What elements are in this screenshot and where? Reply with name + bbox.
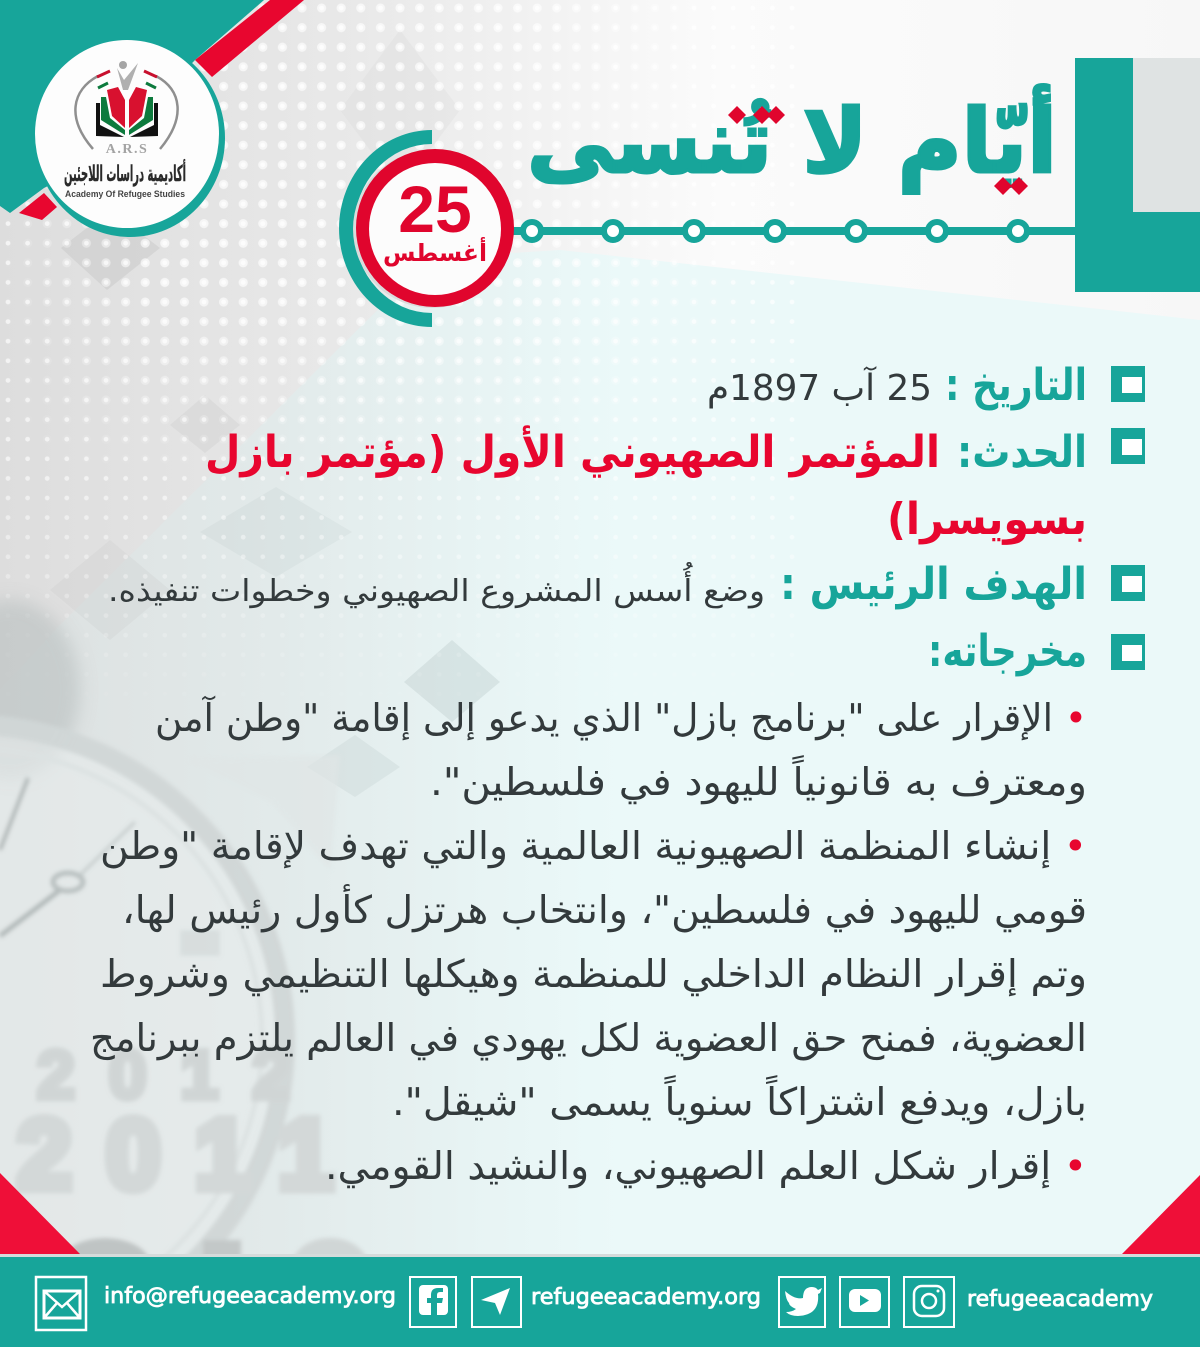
icon: facebook xyxy=(410,1277,456,1327)
website: refugeeacademy.org xyxy=(531,1285,761,1310)
outcomes list: • إقرار شكل العلم الصهيوني، والنشيد القومي. xyxy=(325,1144,1087,1189)
title red diamond dots xyxy=(728,106,1028,195)
timeline xyxy=(510,222,1075,240)
outcomes list xyxy=(90,695,1087,1189)
date line: 25 آب 1897م xyxy=(707,365,932,409)
outcomes list: ومعترف به قانونياً لليهود في فلسطين". xyxy=(430,755,1087,805)
right corner block xyxy=(1075,58,1200,292)
outcomes list: • إنشاء المنظمة الصهيونية العالمية والتي تهدف لإقامة "وطن xyxy=(100,824,1087,869)
icon: twitter xyxy=(779,1277,825,1327)
title: أيّام لا تُنسى xyxy=(527,84,1057,194)
logo laurel xyxy=(75,71,178,149)
event line xyxy=(205,425,1087,545)
main goal line: الهدف الرئيس : xyxy=(780,559,1087,610)
footer bar xyxy=(0,1254,1200,1347)
logo ARS letters: A.R.S xyxy=(106,142,148,157)
icon: telegram xyxy=(472,1277,521,1327)
outcomes list: بازل، ويدفع اشتراكاً سنوياً يسمى "شيقل". xyxy=(392,1075,1087,1125)
logo book xyxy=(96,61,158,137)
top-left corner shapes xyxy=(0,0,304,220)
clock photo background: 2011 xyxy=(17,1099,333,1209)
logo english name: Academy Of Refugee Studies xyxy=(65,189,185,199)
bottom red corners xyxy=(0,1173,1200,1254)
clock photo background: 2012 xyxy=(37,1037,290,1113)
logo badge xyxy=(35,39,225,237)
event line: بسويسرا) xyxy=(887,494,1087,545)
square bullets xyxy=(1111,366,1145,670)
event line: المؤتمر الصهيوني الأول (مؤتمر بازل xyxy=(205,425,940,478)
date number: 25 xyxy=(398,172,472,246)
outcomes heading: مخرجاته: xyxy=(928,626,1087,677)
date month: أغسطس xyxy=(383,237,487,267)
date line: التاريخ : xyxy=(945,360,1087,411)
main goal line: وضع أُسس المشروع الصهيوني وخطوات تنفيذه. xyxy=(108,561,765,609)
event line: الحدث: xyxy=(957,427,1087,478)
logo badge: أكاديمية دراسات اللاجئين xyxy=(64,158,186,187)
outcomes list: • الإقرار على "برنامج بازل" الذي يدعو إلى إقامة "وطن آمن xyxy=(155,695,1087,741)
main goal line xyxy=(108,559,1087,610)
email address: info@refugeeacademy.org xyxy=(104,1284,396,1309)
social handle: refugeeacademy xyxy=(967,1287,1153,1312)
date line xyxy=(707,360,1087,411)
icon: youtube xyxy=(840,1277,889,1327)
outcomes list: العضوية، فمنح حق العضوية لكل يهودي في العالم يلتزم ببرنامج xyxy=(90,1016,1087,1061)
icon: email xyxy=(36,1277,86,1330)
icon: instagram xyxy=(904,1277,954,1327)
clock photo background xyxy=(0,600,368,1347)
outcomes list: قومي لليهود في فلسطين"، وانتخاب هرتزل كأول رئيس لها، xyxy=(122,884,1087,933)
date badge xyxy=(339,130,514,327)
outcomes list: وتم إقرار النظام الداخلي للمنظمة وهيكلها التنظيمي وشروط xyxy=(100,952,1087,997)
